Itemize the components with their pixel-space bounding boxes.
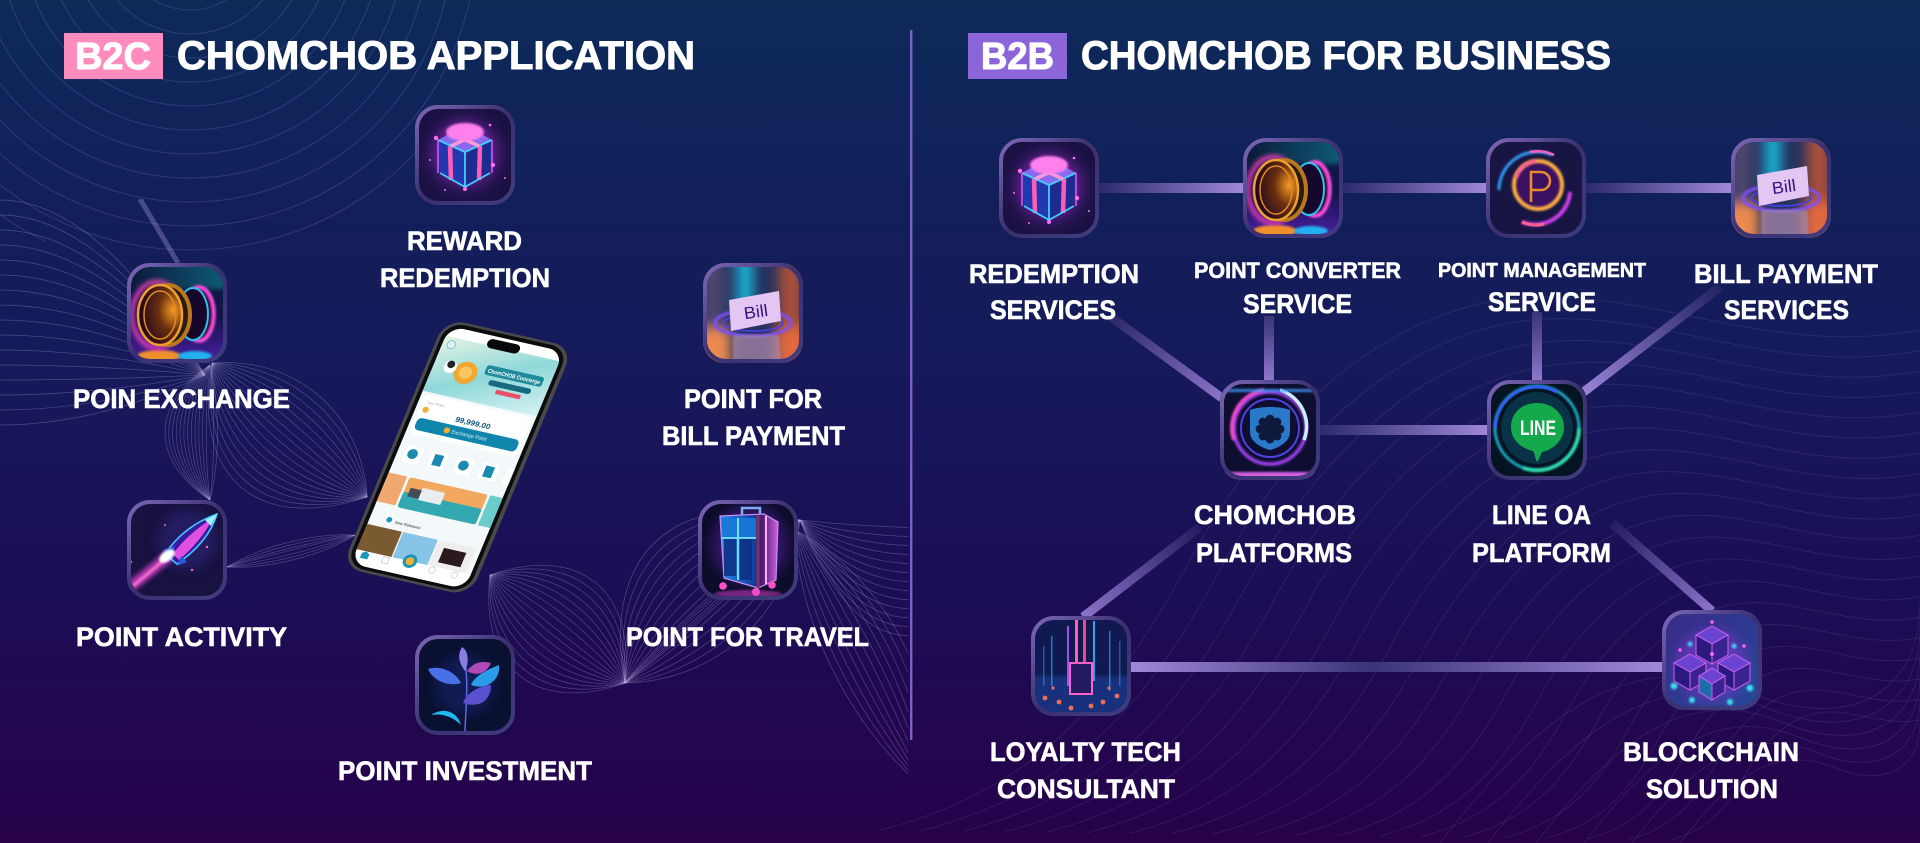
phone mockup: Exchange Point <box>450 430 488 443</box>
icon: point exchange coin <box>127 263 227 363</box>
phone mockup: New Releases <box>394 520 422 530</box>
label: point converter service: POINT CONVERTER <box>1194 258 1401 283</box>
panel: B2B services <box>969 128 1878 804</box>
phone mockup: 99,999.00 <box>454 415 492 431</box>
icon: bill payment services <box>1721 128 1841 248</box>
label: redemption services <box>969 259 1139 325</box>
panel: B2C services <box>73 105 869 786</box>
icon: reward gift <box>415 105 515 205</box>
label: point for bill payment: BILL PAYMENT <box>662 421 845 451</box>
icon: bill payment <box>693 253 813 373</box>
label: line oa platform: PLATFORM <box>1472 538 1611 568</box>
section: B2B heading: B2B <box>981 36 1054 78</box>
label: chomchob platforms: PLATFORMS <box>1196 538 1352 568</box>
phone mockup: Your Point <box>426 401 446 408</box>
label: loyalty tech consultant: CONSULTANT <box>997 774 1175 804</box>
label: point management service <box>1438 260 1646 317</box>
background: wave mesh left <box>0 199 908 774</box>
label: point for bill payment <box>662 384 845 451</box>
label: point converter service: SERVICE <box>1243 289 1352 319</box>
icon: blockchain <box>1662 610 1762 710</box>
label: point activity: POINT ACTIVITY <box>76 622 287 652</box>
label: loyalty tech consultant <box>990 737 1181 804</box>
label: bill payment services <box>1694 259 1878 325</box>
label: point management service: POINT MANAGEMENT <box>1438 260 1646 282</box>
label: point investment: POINT INVESTMENT <box>338 756 592 786</box>
label: reward redemption: REDEMPTION <box>380 263 550 293</box>
icon: line oa <box>1487 380 1587 480</box>
label: bill payment services: BILL PAYMENT <box>1694 259 1878 289</box>
label: line oa platform: LINE OA <box>1492 500 1591 530</box>
icon: redemption services <box>999 138 1099 238</box>
icon: point management <box>1486 138 1586 238</box>
label: blockchain solution: SOLUTION <box>1646 774 1778 804</box>
label: blockchain solution: BLOCKCHAIN <box>1623 737 1799 767</box>
icon: travel suitcase <box>698 500 798 600</box>
label: chomchob platforms: CHOMCHOB <box>1194 500 1356 530</box>
label: point management service: SERVICE <box>1488 287 1596 317</box>
label: redemption services: SERVICES <box>990 295 1116 325</box>
label: point converter service <box>1194 258 1401 319</box>
background: concentric arcs <box>0 0 470 250</box>
section: B2C heading: B2C <box>75 36 151 78</box>
label: point for bill payment: POINT FOR <box>684 384 822 414</box>
icon: investment plant <box>415 635 515 735</box>
label: reward redemption <box>380 226 550 293</box>
icon: chomchob platforms <box>1220 380 1320 480</box>
label: line oa platform <box>1472 500 1611 568</box>
label: poin exchange: POIN EXCHANGE <box>73 384 290 414</box>
label: loyalty tech consultant: LOYALTY TECH <box>990 737 1181 767</box>
section: B2C heading: CHOMCHOB APPLICATION <box>177 34 695 78</box>
label: chomchob platforms <box>1194 500 1356 568</box>
section: B2B heading: CHOMCHOB FOR BUSINESS <box>1081 34 1611 78</box>
phone mockup: ChomCHOB Concierge <box>486 369 541 386</box>
phone mockup <box>342 318 577 597</box>
background: wave lines right <box>880 297 1920 843</box>
label: bill payment services: SERVICES <box>1724 295 1849 325</box>
label: redemption services: REDEMPTION <box>969 259 1139 289</box>
icon: point converter <box>1243 138 1343 238</box>
divider <box>910 30 912 740</box>
icon: point activity rocket <box>127 500 227 600</box>
icon: loyalty tech <box>1031 616 1131 716</box>
label: point for travel: POINT FOR TRAVEL <box>626 622 869 652</box>
label: blockchain solution <box>1623 737 1799 804</box>
network connectors <box>1083 183 1732 672</box>
label: reward redemption: REWARD <box>407 226 522 256</box>
